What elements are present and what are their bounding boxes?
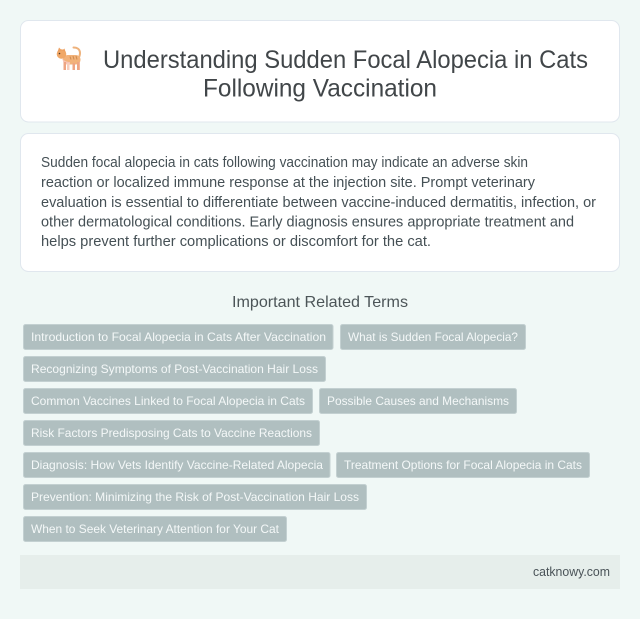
description text: other dermatological conditions. Early diagnosis ensures appropriate treatment and [41, 214, 574, 230]
tag: causes: Possible Causes and Mechanisms [327, 394, 509, 408]
heading: related terms: Important Related Terms [232, 294, 408, 311]
tag: what is [340, 324, 526, 350]
title text: Following Vaccination [203, 74, 437, 102]
description text: Sudden focal alopecia in cats following vaccination may indicate an adverse skin [41, 155, 528, 171]
tag: prevention [24, 484, 366, 510]
tag: introduction: Introduction to Focal Alopecia in Cats After Vaccination [31, 330, 326, 344]
tag: common vaccines: Common Vaccines Linked to Focal Alopecia in Cats [31, 394, 305, 408]
tag: when to seek [24, 516, 286, 542]
tag: treatment [336, 452, 590, 478]
tag: risk factors: Risk Factors Predisposing Cats to Vaccine Reactions [31, 426, 312, 440]
tags: related terms [24, 324, 590, 542]
tag: symptoms: Recognizing Symptoms of Post-Vaccination Hair Loss [31, 362, 318, 376]
description text: helps prevent further complications or discomfort for the cat. [41, 234, 431, 250]
description text: evaluation is essential to differentiate between vaccine-induced dermatitis, infection, or [41, 195, 596, 211]
tag: diagnosis [24, 452, 330, 478]
tag: causes [320, 388, 516, 414]
tag: treatment: Treatment Options for Focal Alopecia in Cats [344, 458, 582, 472]
tag: symptoms [24, 356, 326, 382]
footer source text: catknowy.com [533, 565, 610, 579]
tag: common vaccines [24, 388, 312, 414]
panel: description card [20, 134, 620, 272]
tag: diagnosis: Diagnosis: How Vets Identify Vaccine-Related Alopecia [31, 458, 323, 472]
tag: when to seek: When to Seek Veterinary Attention for Your Cat [31, 522, 280, 536]
icon: cat [57, 48, 80, 70]
description text: reaction or localized immune response at the injection site. Prompt veterinary [41, 175, 536, 191]
tag: prevention: Prevention: Minimizing the Risk of Post-Vaccination Hair Loss [31, 490, 359, 504]
description text [41, 155, 596, 250]
panel: title card [20, 20, 620, 122]
title text: Understanding Sudden Focal Alopecia in Cats [103, 46, 588, 74]
tag: risk factors [24, 420, 320, 446]
tag: what is: What is Sudden Focal Alopecia? [348, 330, 518, 344]
footer [20, 555, 620, 589]
tag: introduction [24, 324, 333, 350]
